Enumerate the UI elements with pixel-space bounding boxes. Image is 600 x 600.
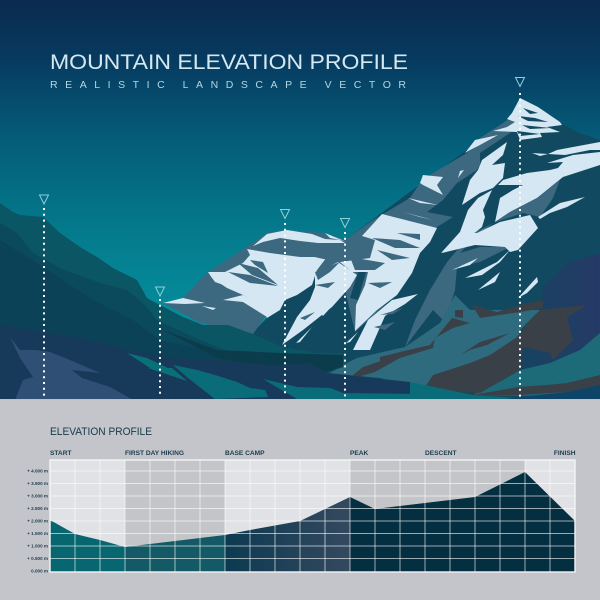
- right navy shadow: [503, 253, 600, 380]
- section labels: START: [50, 450, 72, 457]
- snow: flecks below patch: [296, 306, 332, 343]
- lower right teal slope: [473, 333, 600, 397]
- marker: start: [40, 195, 48, 397]
- thin horizon highlight: [0, 399, 600, 400]
- elevation axis labels: + 3.000 m: [27, 494, 48, 498]
- navy foreground: [0, 325, 420, 400]
- section labels: DESCENT: [425, 450, 457, 457]
- elevation axis labels: [27, 468, 48, 574]
- chart grid: [50, 460, 575, 572]
- snow: mid main field: [340, 214, 437, 331]
- elevation axis labels: + 1.500 m: [27, 531, 48, 536]
- elevation axis labels: 0.000 m: [31, 568, 48, 574]
- valley dark ridge: [163, 330, 343, 372]
- teal slivers on left ground: [127, 353, 187, 381]
- chart frame: [50, 460, 575, 572]
- section labels: BASE CAMP: [225, 450, 265, 457]
- snow: right streak on shadow: [538, 197, 585, 219]
- teal ground far right: [410, 382, 530, 399]
- elevation axis labels: + 4.000 m: [27, 468, 48, 474]
- chart background bands: [50, 460, 575, 572]
- section labels: [50, 450, 576, 457]
- panel: mountain scene: [0, 0, 600, 400]
- slate faces of the ridge: [163, 118, 517, 334]
- snow: upper slate flecks: [403, 175, 443, 220]
- left foreground slate rock: [10, 337, 133, 400]
- elevation axis labels: + 2.500 m: [27, 506, 48, 511]
- summit rock streaks: [517, 108, 550, 136]
- elevation axis labels: + 0.500 m: [27, 556, 48, 561]
- panel: elevation profile: [0, 400, 600, 600]
- snow flecks on gully: [452, 250, 510, 290]
- bottom right navy: [500, 385, 600, 400]
- marker: peak: [340, 218, 350, 397]
- snow: streak below mid field: [353, 294, 418, 350]
- title: MOUNTAIN ELEVATION PROFILE: [50, 51, 408, 74]
- snow: top streak on right shoulder: [548, 142, 600, 155]
- lower teal slope: [327, 295, 540, 390]
- rock streaks on mid field: [350, 233, 420, 288]
- snow: lower right field: [442, 215, 538, 253]
- elevation axis labels: + 2.000 m: [27, 518, 48, 524]
- section labels: PEAK: [350, 450, 369, 457]
- snow sliver by peak line: [346, 332, 358, 343]
- teal ground right: [263, 379, 530, 399]
- snow: ridge fleck: [325, 233, 345, 241]
- shadow spur under mid field: [350, 272, 366, 300]
- snow: summit: [493, 98, 562, 140]
- left foothill upper ridge: [0, 203, 347, 375]
- snow: central column: [462, 142, 507, 205]
- snow: large right field: [495, 152, 600, 222]
- dark rock streaks: [347, 300, 600, 395]
- left foothill second layer: [0, 223, 330, 375]
- elevation area: [50, 472, 575, 572]
- panel background: [0, 400, 600, 600]
- snow: sliver left of column: [458, 170, 464, 178]
- waypoint markers: [40, 78, 524, 397]
- snow: central lower column: [441, 190, 492, 253]
- left foothill third layer: [0, 240, 330, 375]
- teal ground left: [173, 365, 268, 399]
- rock streak on patch: [300, 262, 340, 320]
- snow: lower left ridge bands: [163, 275, 267, 317]
- section labels: FIRST DAY HIKING: [125, 450, 184, 457]
- marker: base camp: [280, 210, 290, 397]
- rock streaks on secondary peak: [228, 255, 330, 286]
- snow patch between peak and middle line: [282, 262, 357, 345]
- slate gully: [405, 180, 560, 347]
- elevation axis labels: + 1.000 m: [27, 544, 48, 548]
- elevation axis labels: + 3.500 m: [27, 481, 48, 486]
- main mountain shadow mass: [240, 98, 600, 400]
- snow: secondary peak main field: [208, 249, 327, 318]
- snow sliver near summit marker line: [518, 277, 538, 298]
- marker: first day hiking: [156, 287, 164, 397]
- rock streaks on streak: [374, 308, 403, 330]
- snow: upper left streak: [465, 135, 498, 153]
- marker: summit: [516, 78, 524, 397]
- snow: short streak right shoulder: [532, 153, 548, 156]
- section labels: FINISH: [554, 450, 576, 457]
- sky background: [0, 0, 600, 400]
- chart heading: ELEVATION PROFILE: [50, 426, 152, 438]
- subtitle: REALISTIC LANDSCAPE VECTOR: [50, 79, 406, 91]
- snow: secondary peak cap: [253, 230, 345, 246]
